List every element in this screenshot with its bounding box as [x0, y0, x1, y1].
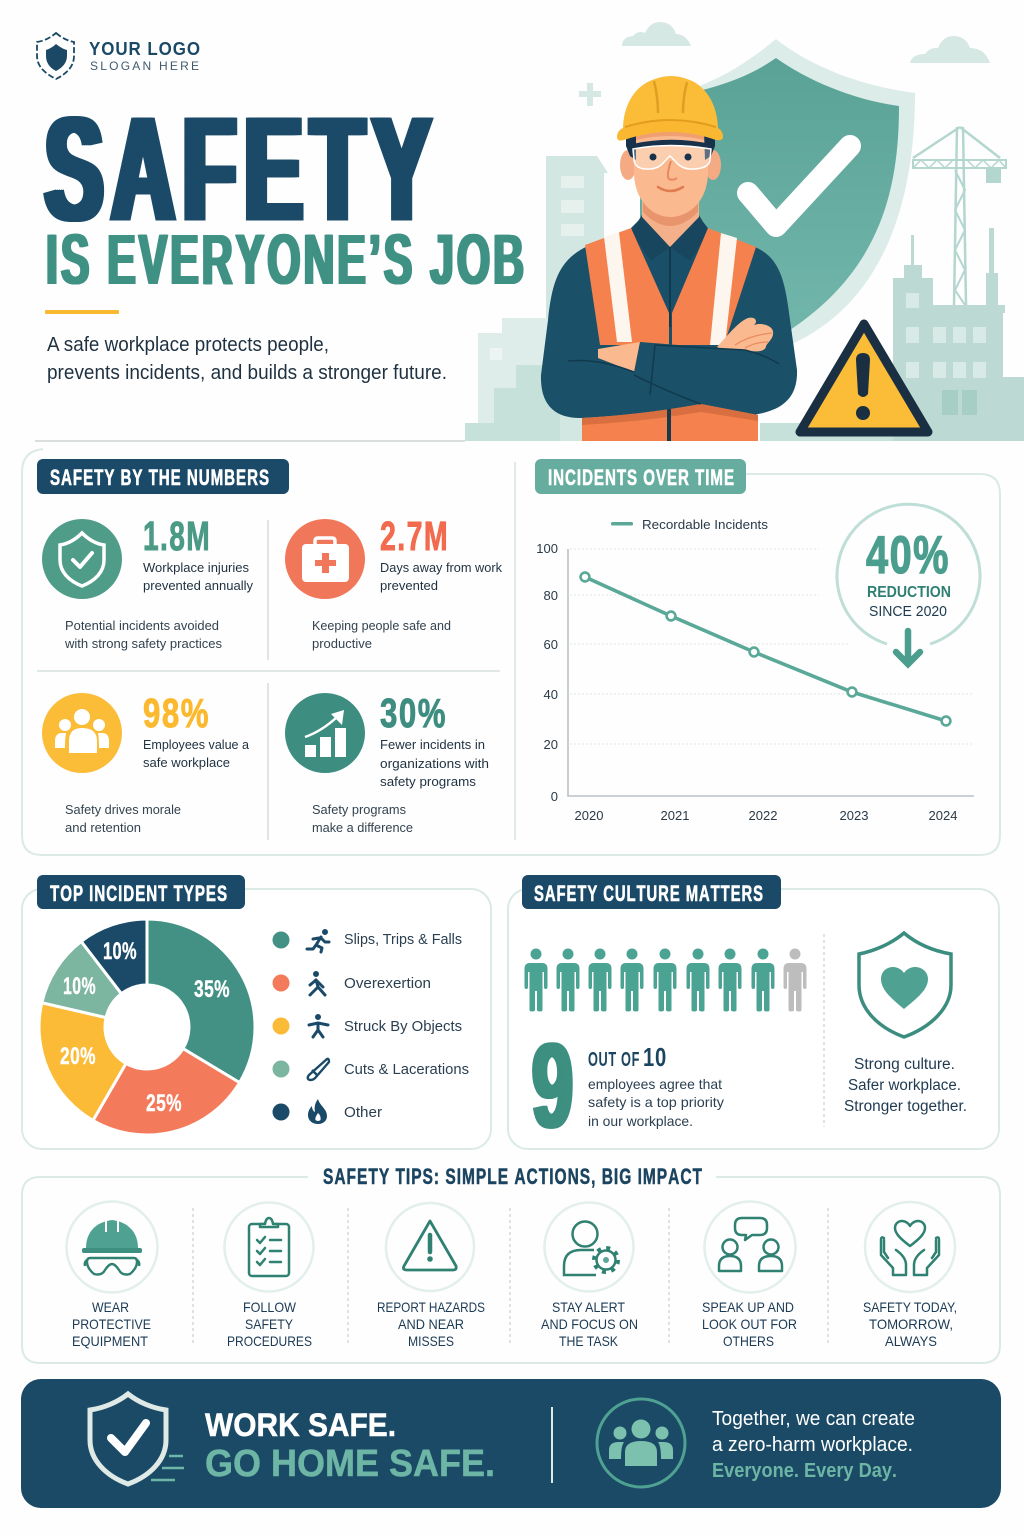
icon: team	[42, 693, 122, 773]
heading	[37, 875, 245, 909]
icon: logo shield	[37, 33, 74, 79]
pictogram: nine of ten people	[524, 948, 806, 1012]
note: Potential incidents avoided	[65, 618, 219, 633]
big number 9: 9	[532, 1019, 573, 1153]
tip: safety always: TOMORROW,	[869, 1316, 953, 1332]
closing text: Together, we can create	[712, 1408, 915, 1430]
statement: employees agree that	[588, 1076, 722, 1092]
icon: first aid kit	[285, 519, 365, 599]
heading: SAFETY CULTURE MATTERS	[534, 881, 764, 906]
panel: incidents over time	[535, 459, 980, 823]
tip: safety always: ALWAYS	[885, 1333, 937, 1349]
legend item: cuts and lacerations: Cuts & Lacerations	[344, 1061, 469, 1078]
out of 10: 10	[643, 1042, 667, 1072]
description: prevented annually	[143, 578, 254, 593]
legend item: other: Other	[344, 1104, 382, 1121]
closing text: a zero-harm workplace.	[712, 1434, 913, 1456]
legend: incident types	[272, 930, 469, 1124]
line chart	[536, 541, 974, 823]
donut labels: 25%	[146, 1090, 182, 1117]
donut labels: 20%	[60, 1043, 96, 1070]
culture slogan	[844, 1056, 967, 1115]
line chart: 20	[544, 737, 558, 752]
accent rule	[45, 310, 119, 314]
logo	[37, 33, 201, 79]
note	[312, 618, 451, 651]
culture slogan: Safer workplace.	[848, 1077, 961, 1094]
callout: 40% reduction: REDUCTION	[867, 584, 951, 601]
note	[312, 802, 413, 835]
panel: safety tips	[22, 1164, 1000, 1363]
tip: speak up: OTHERS	[723, 1333, 774, 1349]
slogan: GO HOME SAFE.	[205, 1443, 495, 1485]
tip: stay alert	[541, 1202, 638, 1349]
description: Workplace injuries	[143, 560, 249, 575]
number: 1.8M	[143, 513, 211, 559]
description	[380, 737, 489, 789]
line chart: 2024	[929, 808, 957, 823]
note	[65, 802, 181, 835]
tip: stay alert: AND FOCUS ON	[541, 1316, 638, 1332]
callout: 40% reduction	[837, 504, 980, 664]
legend item: struck by objects: Struck By Objects	[344, 1018, 462, 1035]
banner: work safe	[21, 1379, 1001, 1508]
heading	[522, 875, 781, 909]
description: safety programs	[380, 774, 477, 789]
line chart: 40	[544, 687, 558, 702]
number: 30%	[380, 690, 447, 736]
heading: TOP INCIDENT TYPES	[50, 881, 228, 906]
hard hat	[617, 76, 723, 141]
line chart: 2023	[840, 808, 868, 823]
note: Safety drives morale	[65, 802, 181, 817]
legend item: struck by objects	[272, 1014, 462, 1037]
note: productive	[312, 636, 372, 651]
closing text: Everyone. Every Day.	[712, 1460, 897, 1482]
legend item: slips, trips and falls: Slips, Trips & Falls	[344, 931, 462, 948]
statement: in our workplace.	[588, 1113, 693, 1129]
panel: numbers and incidents frame	[22, 449, 1000, 855]
description: organizations with	[380, 756, 489, 771]
panel: safety culture matters	[508, 875, 999, 1153]
tip: follow procedures: SAFETY	[245, 1316, 294, 1332]
intro text: A safe workplace protects people,	[47, 334, 329, 356]
description	[143, 737, 250, 770]
jacket	[541, 245, 797, 418]
donut labels: 10%	[63, 973, 96, 1000]
crossed arms and hands	[568, 318, 782, 404]
heading: INCIDENTS OVER TIME	[548, 465, 735, 490]
tip: protective equipment	[66, 1202, 158, 1349]
statement: safety is a top priority	[588, 1094, 724, 1110]
heading	[535, 459, 746, 494]
line chart: 80	[544, 588, 558, 603]
worker	[541, 76, 797, 441]
tip: speak up	[702, 1202, 797, 1349]
line chart: 0	[551, 789, 558, 804]
tip: speak up: LOOK OUT FOR	[702, 1316, 797, 1332]
legend item: cuts and lacerations	[272, 1059, 469, 1080]
slogan: SLOGAN HERE	[90, 59, 199, 73]
tip: speak up: SPEAK UP AND	[702, 1299, 794, 1315]
donut labels	[60, 938, 230, 1117]
heading: SAFETY TIPS: SIMPLE ACTIONS, BIG IMPACT	[323, 1164, 703, 1189]
out of 10: OUT OF	[588, 1049, 640, 1071]
number: 2.7M	[380, 513, 449, 559]
background skyline left	[465, 156, 608, 441]
tip: follow procedures: PROCEDURES	[227, 1333, 312, 1349]
tip: stay alert: THE TASK	[559, 1333, 619, 1349]
warning sign	[800, 324, 928, 432]
heading: SAFETY BY THE NUMBERS	[50, 465, 270, 490]
title: SAFETY	[45, 87, 439, 252]
slogan: WORK SAFE.	[205, 1407, 396, 1443]
tip: report hazards: REPORT HAZARDS	[377, 1299, 485, 1315]
callout: 40% reduction: SINCE 2020	[869, 603, 947, 620]
subtitle: IS EVERYONE’S JOB	[46, 221, 527, 300]
logo name: YOUR LOGO	[89, 39, 201, 59]
tip: protective equipment: PROTECTIVE	[72, 1316, 151, 1332]
tip: safety always: SAFETY TODAY,	[863, 1299, 957, 1315]
legend item: slips, trips and falls	[272, 930, 462, 952]
culture slogan: Stronger together.	[844, 1098, 967, 1115]
line chart: 60	[544, 637, 558, 652]
tip: protective equipment: EQUIPMENT	[72, 1333, 148, 1349]
background skyline right with crane	[760, 127, 1024, 441]
legend item: overexertion	[272, 972, 431, 995]
shirt and collar	[631, 215, 709, 327]
panel: top incident types	[22, 875, 491, 1149]
stat: 1.8M injuries prevented	[42, 513, 254, 651]
header baseline	[35, 440, 465, 442]
icon: team circle	[597, 1399, 685, 1487]
description: prevented	[380, 578, 438, 593]
intro text: prevents incidents, and builds a stronger future.	[47, 362, 447, 384]
panel: safety by the numbers	[37, 459, 502, 840]
icon: banner shield	[90, 1394, 184, 1484]
tip: stay alert: STAY ALERT	[552, 1299, 625, 1315]
stat: 98% employees	[42, 690, 250, 835]
clouds and plus	[579, 22, 990, 106]
legend item: overexertion: Overexertion	[344, 975, 431, 992]
description: Fewer incidents in	[380, 737, 485, 752]
line chart: 2021	[661, 808, 689, 823]
icon: shield check	[42, 519, 122, 599]
tip: report hazards: AND NEAR	[398, 1316, 464, 1332]
description: Days away from work	[380, 560, 502, 575]
icon: rising bars	[285, 693, 365, 773]
legend: Recordable Incidents	[642, 517, 769, 532]
arrow: down	[896, 631, 920, 664]
hero illustration	[465, 22, 1024, 441]
note: Keeping people safe and	[312, 618, 451, 633]
description	[380, 560, 502, 593]
closing text	[712, 1408, 915, 1482]
donut labels: 10%	[103, 938, 137, 965]
note: Safety programs	[312, 802, 406, 817]
stat: 30% fewer incidents	[285, 690, 489, 835]
note	[64, 618, 222, 651]
line chart: 100	[536, 541, 558, 556]
vest	[582, 228, 758, 441]
line chart: 2022	[749, 808, 777, 823]
large shield with check	[640, 39, 915, 345]
tip: report hazards	[377, 1203, 485, 1349]
note: and retention	[65, 820, 141, 835]
description: safe workplace	[143, 755, 230, 770]
icon: shield heart	[859, 933, 951, 1037]
tip: follow procedures	[224, 1202, 314, 1349]
callout: 40% reduction: 40%	[866, 526, 950, 585]
number: 98%	[143, 690, 210, 736]
description	[143, 560, 254, 593]
slogan	[205, 1407, 495, 1485]
stat: 2.7M days	[285, 513, 502, 651]
statement	[588, 1076, 724, 1129]
heading	[37, 459, 289, 494]
note: make a difference	[312, 820, 413, 835]
legend item: other	[272, 1099, 382, 1124]
description: Employees value a	[143, 737, 250, 752]
line chart: 2020	[575, 808, 603, 823]
tip: protective equipment: WEAR	[92, 1299, 129, 1315]
tip: follow procedures: FOLLOW	[243, 1299, 297, 1315]
donut labels: 35%	[194, 976, 230, 1003]
tip: safety always	[863, 1202, 957, 1349]
donut chart	[39, 919, 255, 1135]
tip: report hazards: MISSES	[408, 1333, 454, 1349]
head and neck	[620, 130, 721, 247]
intro text	[47, 334, 447, 384]
culture slogan: Strong culture.	[854, 1056, 955, 1073]
note: with strong safety practices	[64, 636, 222, 651]
